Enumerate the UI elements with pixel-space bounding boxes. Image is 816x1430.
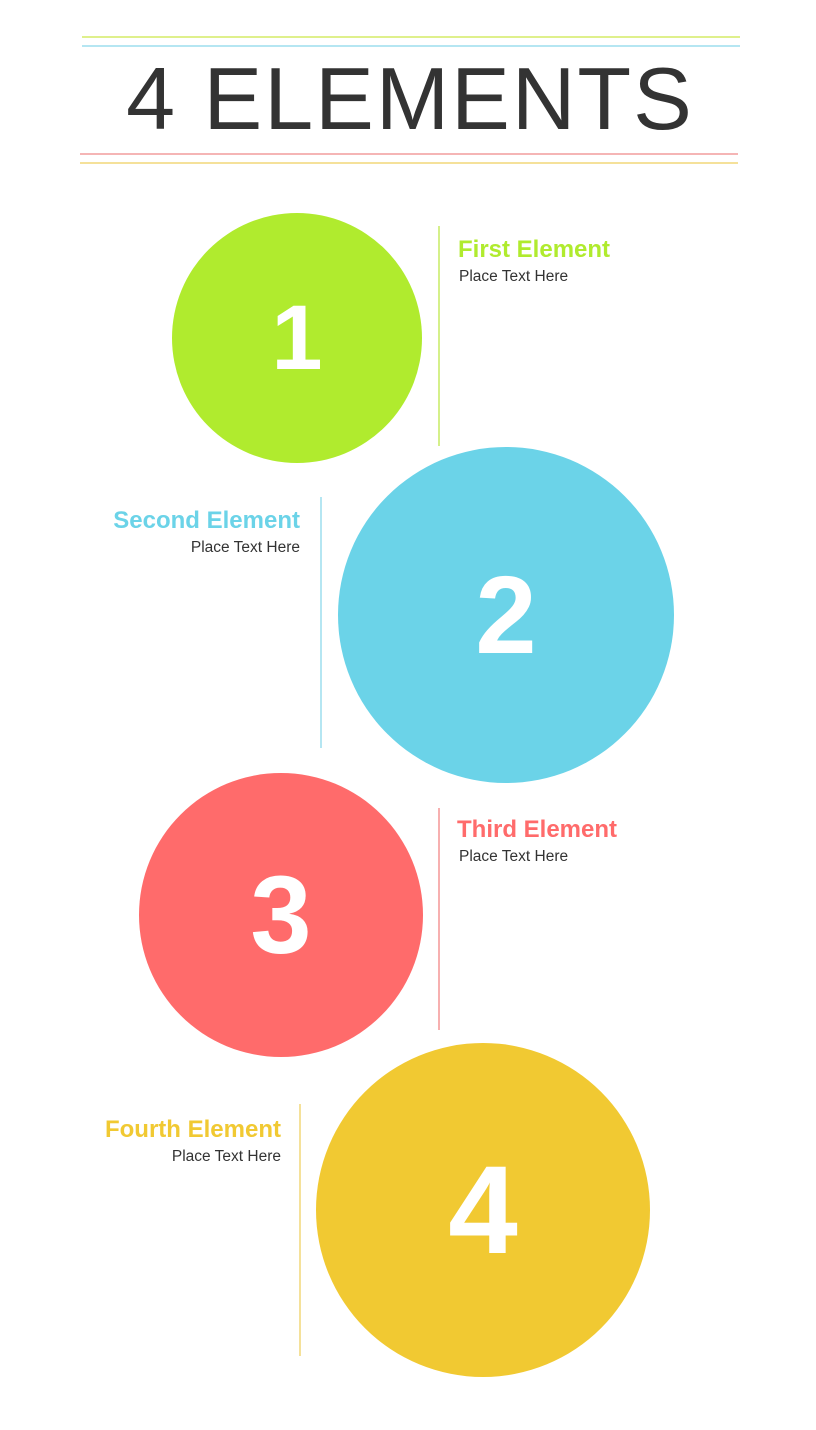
text 4 (105, 1116, 281, 1165)
text 2 (113, 507, 300, 556)
circle 3: 3 (250, 854, 312, 976)
text 1: Place Text Here (459, 268, 568, 285)
circle 1 (172, 213, 422, 463)
text 4: Place Text Here (172, 1148, 281, 1165)
text 2: Second Element (113, 507, 300, 534)
circle 1: 1 (271, 286, 323, 388)
text 1 (458, 236, 610, 285)
divider 3 (438, 808, 440, 1030)
text 4: Fourth Element (105, 1116, 281, 1143)
circle 3 (139, 773, 423, 1057)
divider 4 (299, 1104, 301, 1356)
text 3: Place Text Here (459, 848, 568, 865)
divider 2 (320, 497, 322, 748)
circle 2 (338, 447, 674, 783)
text 3: Third Element (457, 816, 617, 843)
circle 4 (316, 1043, 650, 1377)
circle 4: 4 (448, 1140, 518, 1280)
text 1: First Element (458, 236, 610, 263)
text 3 (457, 816, 617, 865)
text 2: Place Text Here (191, 539, 300, 556)
divider 1 (438, 226, 440, 446)
circle 2: 2 (475, 554, 537, 676)
title: 4 ELEMENTS (126, 49, 694, 148)
